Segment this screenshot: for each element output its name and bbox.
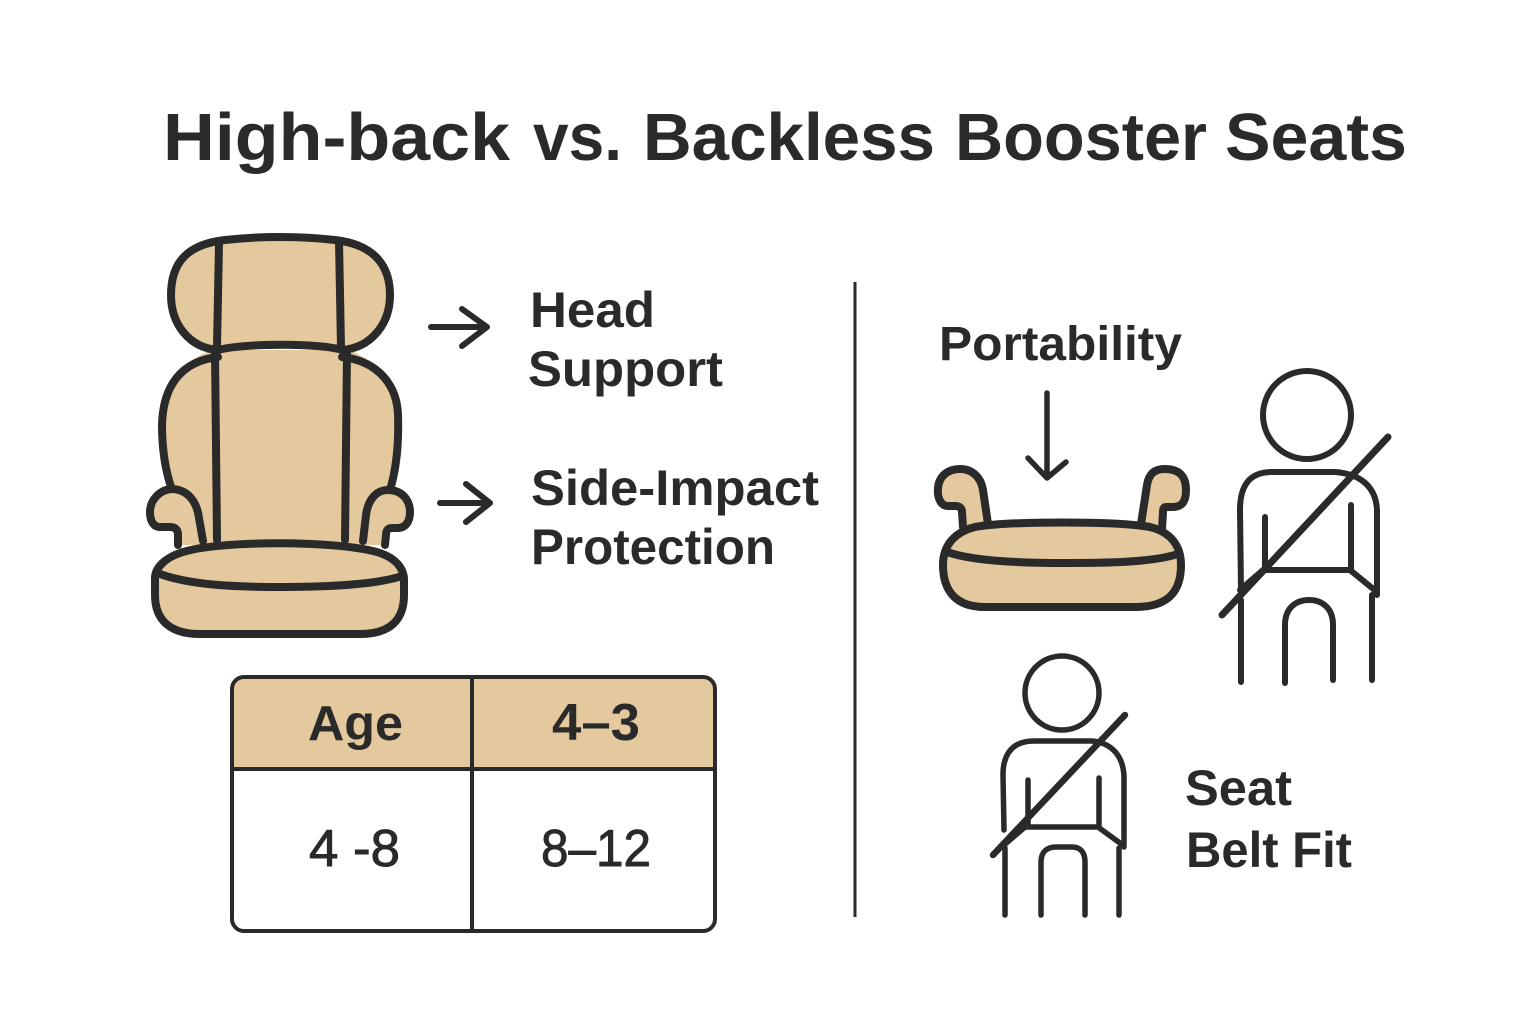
- divider: [854, 282, 856, 917]
- cushion seam: [947, 552, 1178, 563]
- seat back outline: [162, 357, 398, 490]
- icon: backless booster seat: [938, 469, 1186, 607]
- label: head support: [528, 282, 723, 397]
- seat belt: [1222, 437, 1388, 615]
- icon: high-back booster seat: [150, 237, 410, 634]
- seat belt: [993, 715, 1125, 855]
- title: High-back: [163, 100, 511, 175]
- headrest: [171, 237, 390, 350]
- arms: [1265, 505, 1351, 570]
- right armrest: [1141, 469, 1186, 529]
- title: Seats: [1225, 100, 1407, 175]
- label: head support: Head: [530, 282, 655, 338]
- label: head support: Support: [528, 341, 723, 397]
- body cell: 4-8: 4 -8: [309, 820, 400, 878]
- label: side-impact protection: Side-Impact: [531, 460, 819, 516]
- icon: person with seat belt, small: [993, 656, 1125, 915]
- table frame: [232, 677, 715, 931]
- title: Backless: [643, 100, 935, 175]
- back and headrest straps: [215, 241, 347, 540]
- label: seat belt fit: Seat: [1185, 760, 1292, 816]
- label: seat belt fit: Belt Fit: [1186, 822, 1352, 878]
- table header fill: [233, 678, 714, 768]
- arrow: to head support: [431, 309, 487, 346]
- header cell: age: Age: [308, 697, 403, 751]
- title: Booster: [955, 100, 1207, 175]
- left armrest: [150, 489, 203, 545]
- arrow: to side-impact protection: [440, 484, 490, 522]
- icon: person with seat belt, large: [1222, 371, 1388, 683]
- left armrest: [938, 469, 988, 527]
- label: side-impact protection: [531, 460, 819, 575]
- seat cushion: [155, 543, 404, 634]
- title: [163, 100, 1407, 175]
- cushion seam: [160, 574, 402, 587]
- head: [1263, 371, 1351, 459]
- body cell: 8-12: 8–12: [541, 820, 651, 878]
- label: portability: Portability: [939, 318, 1182, 371]
- table: age ranges: [232, 677, 715, 931]
- title: vs.: [533, 100, 622, 175]
- header cell: 4-3: 4–3: [552, 694, 640, 752]
- seat back fill: [162, 350, 398, 545]
- table rules: [232, 677, 715, 931]
- right armrest: [363, 490, 410, 545]
- label: side-impact protection: Protection: [531, 519, 775, 575]
- legs: [1005, 847, 1119, 915]
- legs: [1241, 595, 1372, 683]
- torso: [1240, 472, 1377, 595]
- arms: [1028, 778, 1099, 826]
- head: [1025, 656, 1099, 730]
- label: seat belt fit: [1185, 760, 1352, 878]
- cushion: [943, 522, 1181, 607]
- arrow: portability to backless booster: [1028, 393, 1066, 478]
- torso: [1003, 741, 1124, 847]
